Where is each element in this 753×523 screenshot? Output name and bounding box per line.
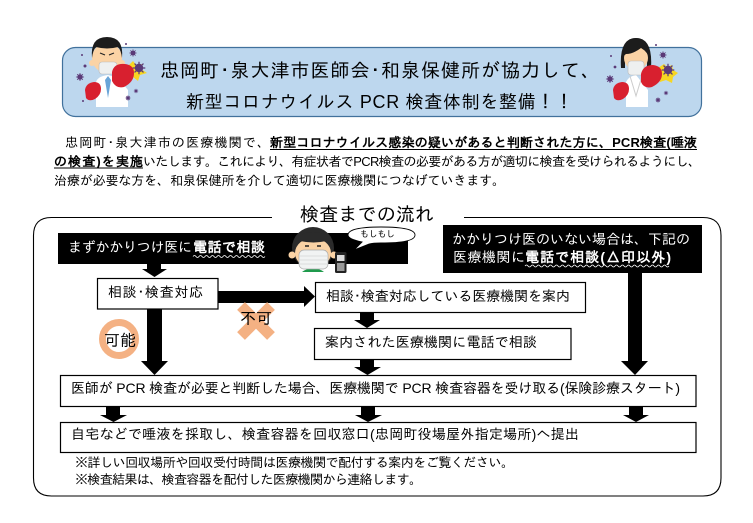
box: collect saliva and submit: 自宅などで唾液を採取し、検査容器を回収窓口(忠岡町役場屋外指定場所)へ提出	[71, 426, 579, 442]
arrow: no family doctor to doctor	[621, 273, 648, 375]
intro paragraph: 新型コロナウイルス感染の疑いがあると判断された方に、PCR検査(唾液	[270, 135, 697, 150]
note: results contact: ※検査結果は、検査容器を配付した医療機関から連絡します。	[75, 472, 422, 487]
banner title line 2: 新型コロナウイルス PCR 検査体制を整備！！	[186, 92, 573, 112]
icon: cross not available: 不可	[240, 311, 272, 328]
arrow: available path	[141, 309, 168, 375]
box: call guided institution: 案内された医療機関に電話で相談	[325, 334, 537, 350]
arrow: call to consultation	[142, 264, 167, 277]
arrow: not available path	[218, 286, 315, 307]
black box: call family doctor	[58, 233, 408, 264]
box: guide to medical institution	[316, 282, 586, 312]
box: doctor decides PCR: 医師が PCR 検査が必要と判断した場合、医療機関で PCR 検査容器を受け取る(保険診療スタート)	[71, 380, 680, 396]
box: guide to medical institution: 相談･検査対応している医療機関を案内	[326, 288, 570, 304]
black box: no family doctor	[443, 225, 702, 273]
icon: circle available: 可能	[104, 332, 136, 350]
arrow: guidance to phone consultation	[354, 312, 380, 328]
arrow: doctor to sampling left	[100, 406, 127, 422]
arrow: doctor to sampling right	[623, 406, 649, 422]
black box: no family doctor: 医療機関に	[453, 249, 525, 265]
intro paragraph: いたします。これにより、有症状者でPCR検査の必要がある方が適切に検査を受けられるようにし、	[143, 154, 701, 169]
banner	[62, 48, 702, 116]
box: collect saliva and submit	[60, 422, 696, 452]
intro paragraph: の検査)を実施	[54, 154, 143, 169]
black box: no family doctor: かかりつけ医のいない場合は、下記の	[452, 231, 690, 247]
intro paragraph	[54, 135, 701, 188]
speech bubble: moshi moshi	[348, 227, 415, 250]
icon: masked person with phone	[288, 227, 346, 273]
banner title line 1: 忠岡町･泉大津市医師会･和泉保健所が協力して、	[160, 60, 600, 82]
icon: male doctor punching virus	[76, 37, 147, 107]
intro paragraph: 忠岡町･泉大津市の医療機関で、	[65, 135, 270, 150]
intro paragraph: 治療が必要な方を、和泉保健所を介して適切に医療機関につなげていきます。	[54, 173, 505, 188]
panel: flow frame	[34, 218, 721, 496]
note: collection details: ※詳しい回収場所や回収受付時間は医療機関で配付する案内をご覧ください。	[75, 455, 514, 470]
heading: flow title: 検査までの流れ	[300, 204, 434, 226]
speech bubble: moshi moshi: もしもし	[360, 229, 395, 239]
icon: cross not available	[240, 306, 272, 336]
box: consultation and testing	[98, 278, 218, 309]
icon: female doctor punching virus	[606, 38, 678, 107]
icon: circle available	[102, 322, 136, 356]
black box: no family doctor: 電話で相談(△印以外)	[525, 249, 671, 265]
black box: call family doctor: まずかかりつけ医に	[68, 239, 192, 255]
box: call guided institution	[314, 328, 571, 360]
box: consultation and testing: 相談･検査対応	[108, 284, 203, 300]
black box: call family doctor: 電話で相談	[193, 239, 266, 255]
box: doctor decides PCR	[60, 376, 696, 406]
arrow: doctor to sampling center	[355, 406, 382, 422]
arrow: phone consultation to doctor	[354, 359, 381, 375]
